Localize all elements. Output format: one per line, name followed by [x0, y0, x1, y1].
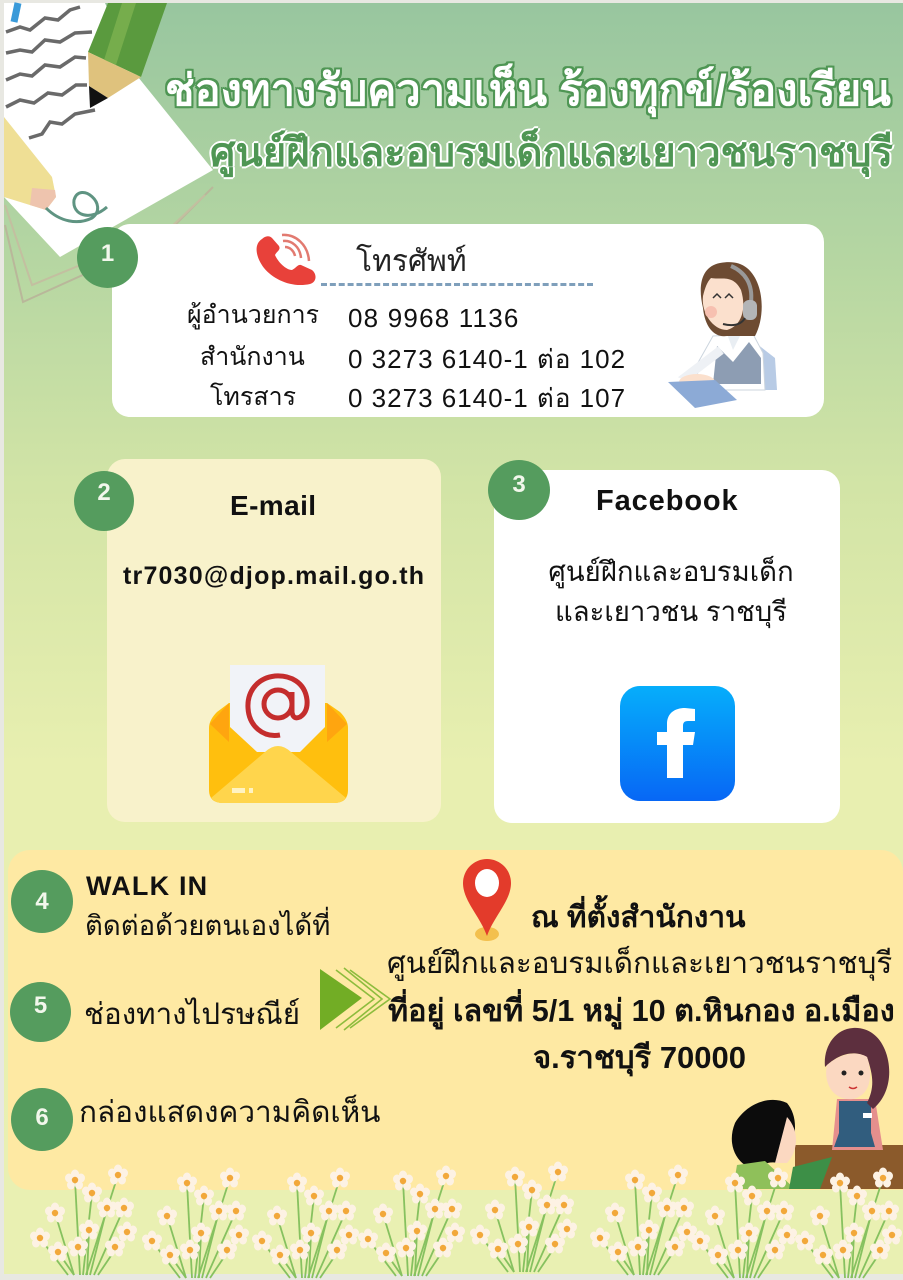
flower meadow: [30, 1162, 902, 1278]
facebook page name: และเยาวชน ราชบุรี: [555, 596, 787, 627]
panel: facebook: [494, 470, 840, 823]
number: fax: 0 3273 6140-1 ต่อ 107: [348, 383, 626, 413]
icon: map pin: [463, 859, 511, 941]
label: office: สำนักงาน: [200, 343, 305, 371]
badge 3: 3: [512, 471, 526, 498]
address line: at office: ณ ที่ตั้งสำนักงาน: [531, 901, 745, 934]
address line: number: ที่อยู่ เลขที่ 5/1 หมู่ 10 ต.หินกอง อ.เมือง: [388, 994, 895, 1028]
illustration: staff and visitor: [732, 1028, 903, 1189]
address block: [387, 895, 895, 1076]
subtitle: ศูนย์ฝึกและอบรมเด็กและเยาวชนราชบุรี: [210, 131, 893, 175]
e-mail address: tr7030@djop.mail.go.th: [123, 562, 425, 590]
text: contact in person: ติดต่อด้วยตนเองได้ที่: [85, 910, 330, 941]
badge 2: [74, 471, 134, 531]
badge 2: 2: [97, 479, 111, 506]
text: walk in: WALK IN: [86, 871, 208, 901]
phone rows: [187, 301, 626, 413]
label: director: ผู้อำนวยการ: [187, 301, 319, 329]
panel: walk-in, post, comment box: [8, 850, 903, 1190]
badge 1: [77, 227, 138, 288]
icon: phone: [256, 234, 316, 285]
badge 6: [11, 1088, 73, 1151]
number: director: 08 9968 1136: [348, 303, 520, 333]
flower clusters: [30, 1162, 902, 1278]
number: office: 0 3273 6140-1 ต่อ 102: [348, 344, 626, 374]
title: ช่องทางรับความเห็น ร้องทุกข์/ร้องเรียน: [165, 67, 891, 115]
illustration: notepad and pencils: [4, 2, 214, 304]
badge 4: [11, 870, 73, 933]
heading: e-mail: E-mail: [230, 490, 316, 521]
icon: facebook logo: [620, 686, 735, 801]
badge 6: 6: [35, 1104, 49, 1130]
heading: telephone: โทรศัพท์: [356, 245, 467, 278]
label: fax: โทรสาร: [210, 383, 296, 411]
address line: centre name: ศูนย์ฝึกและอบรมเด็กและเยาวชนราชบุรี: [387, 947, 892, 980]
badge 4: 4: [35, 888, 49, 914]
badge 5: [10, 982, 71, 1042]
badge 1: 1: [101, 240, 114, 266]
icon: green arrows: [320, 968, 392, 1030]
address line: province: จ.ราชบุรี 70000: [533, 1040, 746, 1075]
icon: envelope with at sign: [209, 665, 348, 803]
heading: facebook: Facebook: [596, 485, 739, 517]
badge 3: [488, 460, 550, 520]
text: postal channel: ช่องทางไปรษณีย์: [84, 998, 300, 1031]
panel: telephone: [112, 224, 824, 417]
text: comment box: กล่องแสดงความคิดเห็น: [79, 1096, 380, 1129]
illustration: call-center operator: [668, 262, 777, 408]
dashed divider: [321, 283, 593, 286]
facebook page name: [548, 556, 794, 628]
facebook page name: ศูนย์ฝึกและอบรมเด็ก: [548, 556, 794, 587]
badge 5: 5: [34, 992, 47, 1019]
panel: e-mail: [107, 459, 441, 822]
